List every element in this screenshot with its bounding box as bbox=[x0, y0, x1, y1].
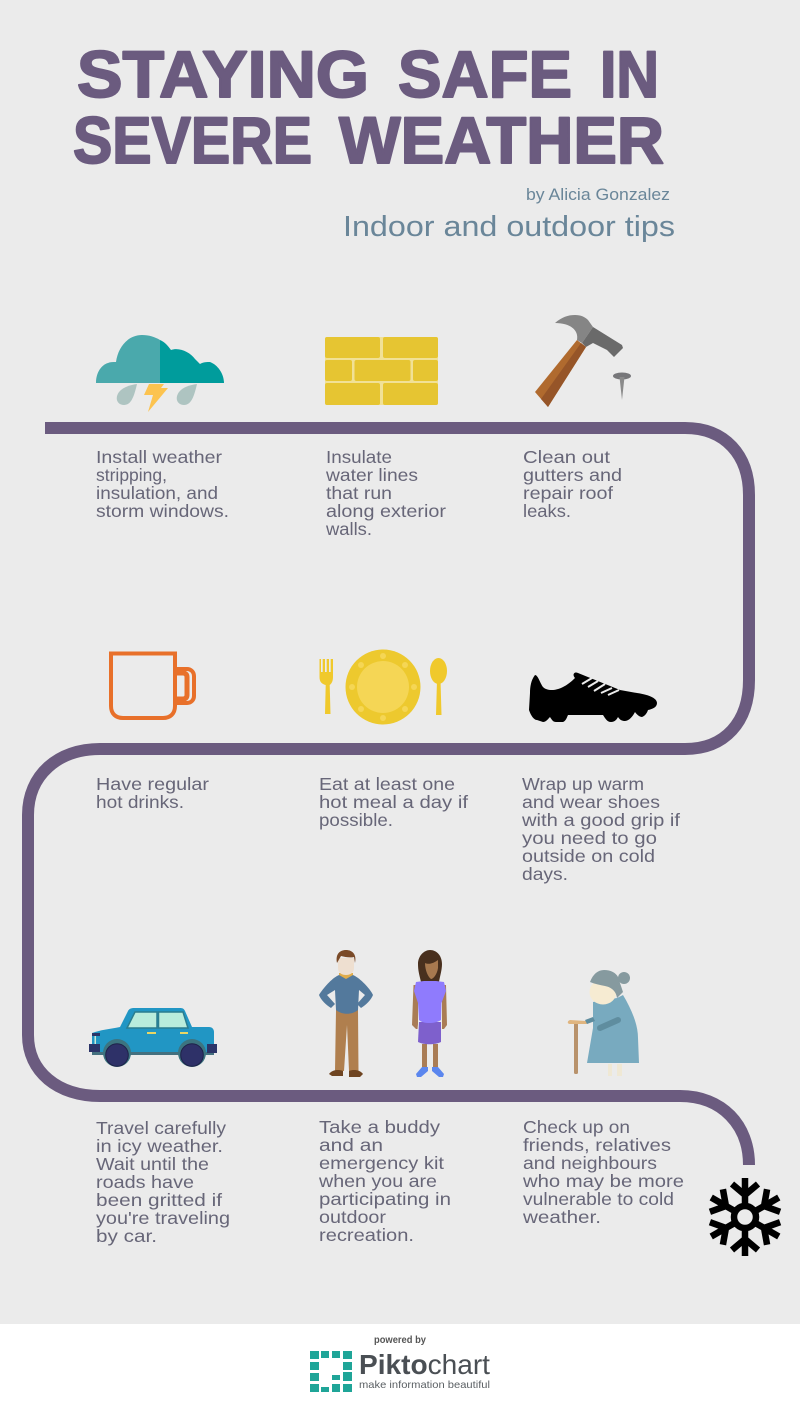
text: icy weather tip: roads have bbox=[96, 1172, 194, 1192]
text: water lines tip bbox=[325, 447, 446, 539]
text: warm shoes tip: and wear shoes bbox=[522, 792, 660, 812]
text: weather stripping tip: stripping, bbox=[96, 465, 167, 485]
text: icy weather tip: been gritted if bbox=[96, 1190, 222, 1210]
text: check on neighbours tip: friends, relatives bbox=[523, 1135, 671, 1155]
text: buddy and kit tip: and an bbox=[319, 1135, 383, 1155]
text: check on neighbours tip: Check up on bbox=[523, 1117, 630, 1137]
text: check on neighbours tip: weather. bbox=[522, 1207, 601, 1227]
text: gutters tip: leaks. bbox=[523, 501, 571, 521]
text: icy weather tip: you're traveling bbox=[96, 1208, 230, 1228]
title: STAYING bbox=[77, 37, 369, 111]
text: check on neighbours tip: and neighbours bbox=[523, 1153, 657, 1173]
text: weather stripping tip bbox=[96, 447, 229, 521]
text: gutters tip: Clean out bbox=[523, 447, 610, 467]
text: warm shoes tip: Wrap up warm bbox=[522, 774, 644, 794]
title bbox=[73, 37, 664, 177]
text: hot drinks tip bbox=[96, 774, 209, 812]
text: check on neighbours tip: who may be more bbox=[522, 1171, 684, 1191]
text: hot meal tip: hot meal a day if bbox=[319, 792, 468, 812]
icon: snowflake bbox=[705, 1178, 785, 1256]
icon: plate with fork and spoon bbox=[320, 650, 447, 724]
text: weather stripping tip: storm windows. bbox=[96, 501, 229, 521]
text: check on neighbours tip: vulnerable to cold bbox=[523, 1189, 674, 1209]
icon: hammer and nail bbox=[535, 315, 631, 407]
text: gutters tip: gutters and bbox=[523, 465, 622, 485]
icon: piktochart logo bbox=[310, 1351, 352, 1392]
text: hot meal tip: possible. bbox=[319, 810, 393, 830]
text: warm shoes tip: outside on cold bbox=[522, 846, 655, 866]
text: warm shoes tip: with a good grip if bbox=[521, 810, 680, 830]
powered by label: powered by bbox=[374, 1335, 426, 1346]
text: icy weather tip bbox=[96, 1118, 230, 1246]
text: weather stripping tip: Install weather bbox=[96, 447, 222, 467]
piktochart wordmark: Piktochart bbox=[359, 1349, 490, 1380]
text: water lines tip: that run bbox=[326, 483, 392, 503]
text: hot meal tip: Eat at least one bbox=[319, 774, 455, 794]
text: hot drinks tip: Have regular bbox=[96, 774, 209, 794]
text: warm shoes tip bbox=[521, 774, 680, 884]
text: hot drinks tip: hot drinks. bbox=[96, 792, 184, 812]
title: WEATHER bbox=[339, 103, 664, 177]
text: water lines tip: along exterior bbox=[326, 501, 446, 521]
text: hot meal tip bbox=[319, 774, 468, 830]
icon: man and woman bbox=[319, 950, 447, 1077]
title: SEVERE bbox=[73, 103, 312, 177]
text: warm shoes tip: you need to go bbox=[522, 828, 657, 848]
text: buddy and kit tip: Take a buddy bbox=[319, 1117, 440, 1137]
icon: brick wall bbox=[325, 337, 438, 405]
icon: shoe bbox=[529, 672, 657, 722]
icon: elderly woman with cane bbox=[568, 970, 639, 1076]
text: check on neighbours tip bbox=[522, 1117, 684, 1227]
text: buddy and kit tip: emergency kit bbox=[319, 1153, 444, 1173]
text: gutters tip: repair roof bbox=[523, 483, 613, 503]
text: buddy and kit tip bbox=[318, 1117, 451, 1245]
text: water lines tip: Insulate bbox=[326, 447, 392, 467]
text: buddy and kit tip: recreation. bbox=[319, 1225, 414, 1245]
icon: mug bbox=[111, 654, 194, 718]
icon: storm cloud bbox=[96, 335, 224, 412]
text: weather stripping tip: insulation, and bbox=[96, 483, 218, 503]
text: warm shoes tip: days. bbox=[522, 864, 568, 884]
winding path line bbox=[28, 428, 749, 1165]
text: icy weather tip: by car. bbox=[96, 1226, 157, 1246]
text: icy weather tip: Travel carefully bbox=[96, 1118, 226, 1138]
author credit: by Alicia Gonzalez bbox=[526, 185, 670, 204]
text: buddy and kit tip: participating in bbox=[319, 1189, 451, 1209]
title: IN bbox=[600, 37, 659, 111]
text: icy weather tip: Wait until the bbox=[96, 1154, 209, 1174]
text: water lines tip: water lines bbox=[325, 465, 418, 485]
text: buddy and kit tip: when you are bbox=[318, 1171, 437, 1191]
subtitle: Indoor and outdoor tips bbox=[343, 211, 675, 243]
icon: car bbox=[89, 1008, 217, 1067]
title: SAFE bbox=[398, 37, 572, 111]
text: water lines tip: walls. bbox=[325, 519, 372, 539]
text: icy weather tip: in icy weather. bbox=[96, 1136, 223, 1156]
text: buddy and kit tip: outdoor bbox=[319, 1207, 386, 1227]
text: gutters tip bbox=[523, 447, 622, 521]
tagline: make information beautiful bbox=[359, 1379, 490, 1391]
footer band bbox=[0, 1324, 800, 1404]
